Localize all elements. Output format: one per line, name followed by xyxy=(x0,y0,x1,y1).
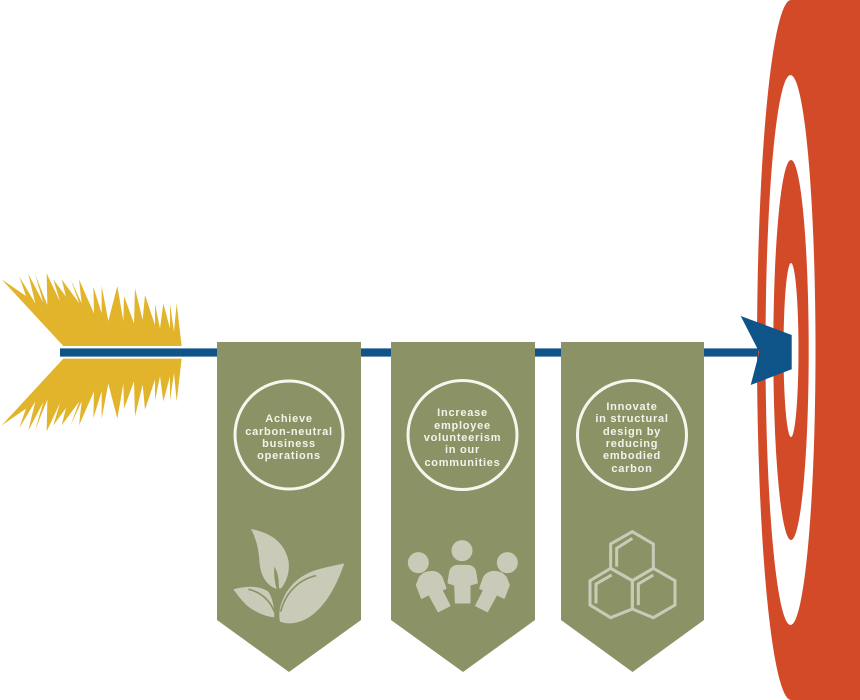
target xyxy=(757,0,860,700)
text: embodied carbon goal: reducing xyxy=(606,438,658,450)
text: carbon-neutral goal xyxy=(245,413,333,462)
panel: volunteerism banner xyxy=(391,342,535,672)
text: carbon-neutral goal: business xyxy=(262,438,316,450)
circle: embodied carbon goal xyxy=(578,380,686,490)
text: volunteerism goal: communities xyxy=(424,457,501,469)
arrow head xyxy=(741,316,792,385)
arrow fletching xyxy=(2,273,182,431)
icon: hexagon molecule xyxy=(590,532,675,618)
text: embodied carbon goal xyxy=(595,401,669,475)
text: embodied carbon goal: in structural xyxy=(595,413,669,425)
text: volunteerism goal xyxy=(424,407,501,469)
circle: volunteerism goal xyxy=(408,380,517,490)
text: embodied carbon goal: design by xyxy=(603,426,661,438)
text: embodied carbon goal: carbon xyxy=(611,463,653,475)
text: carbon-neutral goal: carbon-neutral xyxy=(245,426,333,438)
panel: embodied carbon banner xyxy=(561,342,704,672)
text: volunteerism goal: employee xyxy=(434,420,491,432)
text: embodied carbon goal: embodied xyxy=(603,450,661,462)
arrow shaft xyxy=(60,348,758,357)
text: volunteerism goal: in our xyxy=(445,444,480,456)
text: volunteerism goal: volunteerism xyxy=(424,432,501,444)
icon: people xyxy=(409,541,517,611)
text: carbon-neutral goal: Achieve xyxy=(265,413,313,425)
text: embodied carbon goal: Innovate xyxy=(606,401,658,413)
text: volunteerism goal: Increase xyxy=(437,407,488,419)
circle: carbon-neutral goal xyxy=(235,381,343,489)
icon: leaves xyxy=(233,529,344,623)
panel: carbon-neutral banner xyxy=(217,342,361,672)
text: carbon-neutral goal: operations xyxy=(257,450,321,462)
